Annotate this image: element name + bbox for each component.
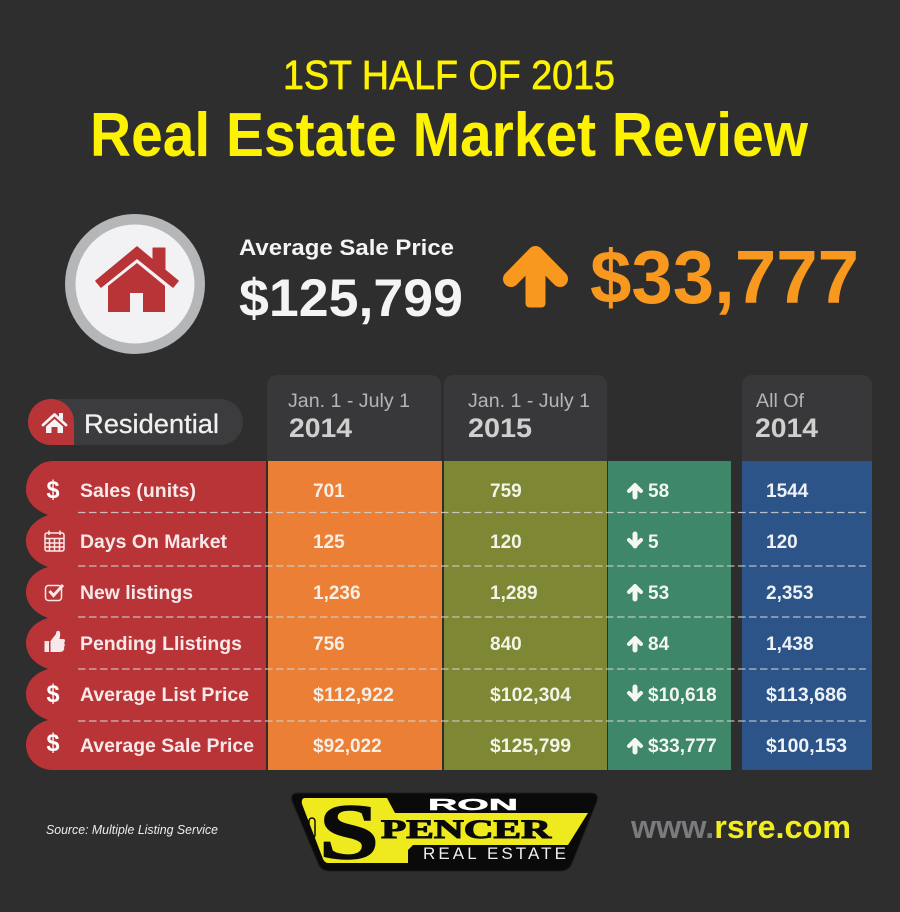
logo: Ron Spencer Real Estate xyxy=(292,788,597,875)
average sale price: $125,799 xyxy=(239,269,463,328)
column values: all of 2014 xyxy=(766,481,847,757)
column values: 2015 half xyxy=(490,481,571,757)
column values: change: 5 xyxy=(648,532,659,553)
icon: dollar: $ xyxy=(46,476,60,504)
row labels: Days On Market xyxy=(80,531,227,553)
icon: checkbox xyxy=(46,585,63,600)
column header: all of 2014: All Of xyxy=(756,391,805,412)
column values: change: 84 xyxy=(648,634,670,655)
residential label: Residential xyxy=(84,409,219,439)
residential label xyxy=(28,399,243,445)
icon: thumbs up xyxy=(44,631,65,652)
column values: 2015 half: $102,304 xyxy=(490,685,571,706)
logo: Ron Spencer Real Estate: PENCER xyxy=(381,815,551,844)
icon: dollar: $ xyxy=(46,729,60,757)
column: olive 2015 xyxy=(444,461,607,770)
icon: dollar: $ xyxy=(46,680,60,708)
average sale price xyxy=(239,235,463,328)
logo: Ron Spencer Real Estate: S xyxy=(319,788,379,875)
change amount: $33,777 xyxy=(590,235,859,319)
column: green change xyxy=(608,461,731,770)
website: www.rsre.com xyxy=(630,809,851,845)
logo: Ron Spencer Real Estate: REAL ESTATE xyxy=(423,844,566,863)
title xyxy=(90,52,809,170)
icon: change arrows xyxy=(629,485,641,752)
column header: 2015 half: Jan. 1 - July 1 xyxy=(468,391,590,412)
icon: small house xyxy=(43,413,66,433)
column values: change: 58 xyxy=(648,481,669,502)
column: orange 2014 xyxy=(268,461,442,770)
column header: 2014 half xyxy=(267,375,441,461)
column: blue all of 2014 xyxy=(742,461,872,770)
row labels: Average List Price xyxy=(80,684,249,706)
row labels xyxy=(80,480,254,757)
column header: 2015 half: 2015 xyxy=(468,413,532,443)
column header: 2014 half: 2014 xyxy=(289,413,352,443)
column values: 2015 half: 1,289 xyxy=(490,583,538,604)
row icons xyxy=(44,476,65,757)
column header: 2014 half: Jan. 1 - July 1 xyxy=(288,391,410,412)
column values: 2014 half: 1,236 xyxy=(313,583,361,604)
change: up arrow xyxy=(511,254,560,307)
column values: change: $33,777 xyxy=(648,736,717,757)
column values: all of 2014: $100,153 xyxy=(766,736,847,757)
title: 1ST HALF OF 2015 xyxy=(283,52,615,98)
logo: Ron Spencer Real Estate: RON xyxy=(428,797,518,814)
row labels: Sales (units) xyxy=(80,480,196,502)
column values: 2015 half: 120 xyxy=(490,532,522,553)
column values: change: 53 xyxy=(648,583,669,604)
column values: 2014 half: $112,922 xyxy=(313,685,394,706)
column values: all of 2014: 1544 xyxy=(766,481,809,502)
column values: all of 2014: $113,686 xyxy=(766,685,847,706)
red row labels background xyxy=(26,461,266,770)
column values: all of 2014: 1,438 xyxy=(766,634,814,655)
average sale price: Average Sale Price xyxy=(239,235,454,260)
column values: 2014 half: $92,022 xyxy=(313,736,382,757)
column header: all of 2014 xyxy=(742,375,872,461)
row labels: New listings xyxy=(80,582,193,604)
column values: 2015 half: 840 xyxy=(490,634,522,655)
column values: all of 2014: 2,353 xyxy=(766,583,814,604)
icon: house in circle xyxy=(65,214,205,354)
column values: change xyxy=(629,481,717,757)
column values: all of 2014: 120 xyxy=(766,532,798,553)
column values: 2014 half xyxy=(313,481,394,757)
title: Real Estate Market Review xyxy=(90,101,809,170)
dashed row separators xyxy=(78,512,866,721)
column values: 2014 half: 756 xyxy=(313,634,345,655)
source note: Source: Multiple Listing Service xyxy=(46,823,218,837)
column values: change: $10,618 xyxy=(648,685,717,706)
column header: 2015 half xyxy=(444,375,607,461)
column values: 2014 half: 125 xyxy=(313,532,345,553)
column values: 2015 half: 759 xyxy=(490,481,522,502)
column header: all of 2014: 2014 xyxy=(755,413,818,443)
column values: 2015 half: $125,799 xyxy=(490,736,571,757)
column values: 2014 half: 701 xyxy=(313,481,345,502)
row labels: Pending Llistings xyxy=(80,633,242,655)
row labels: Average Sale Price xyxy=(80,735,254,757)
icon: calendar xyxy=(45,530,64,551)
